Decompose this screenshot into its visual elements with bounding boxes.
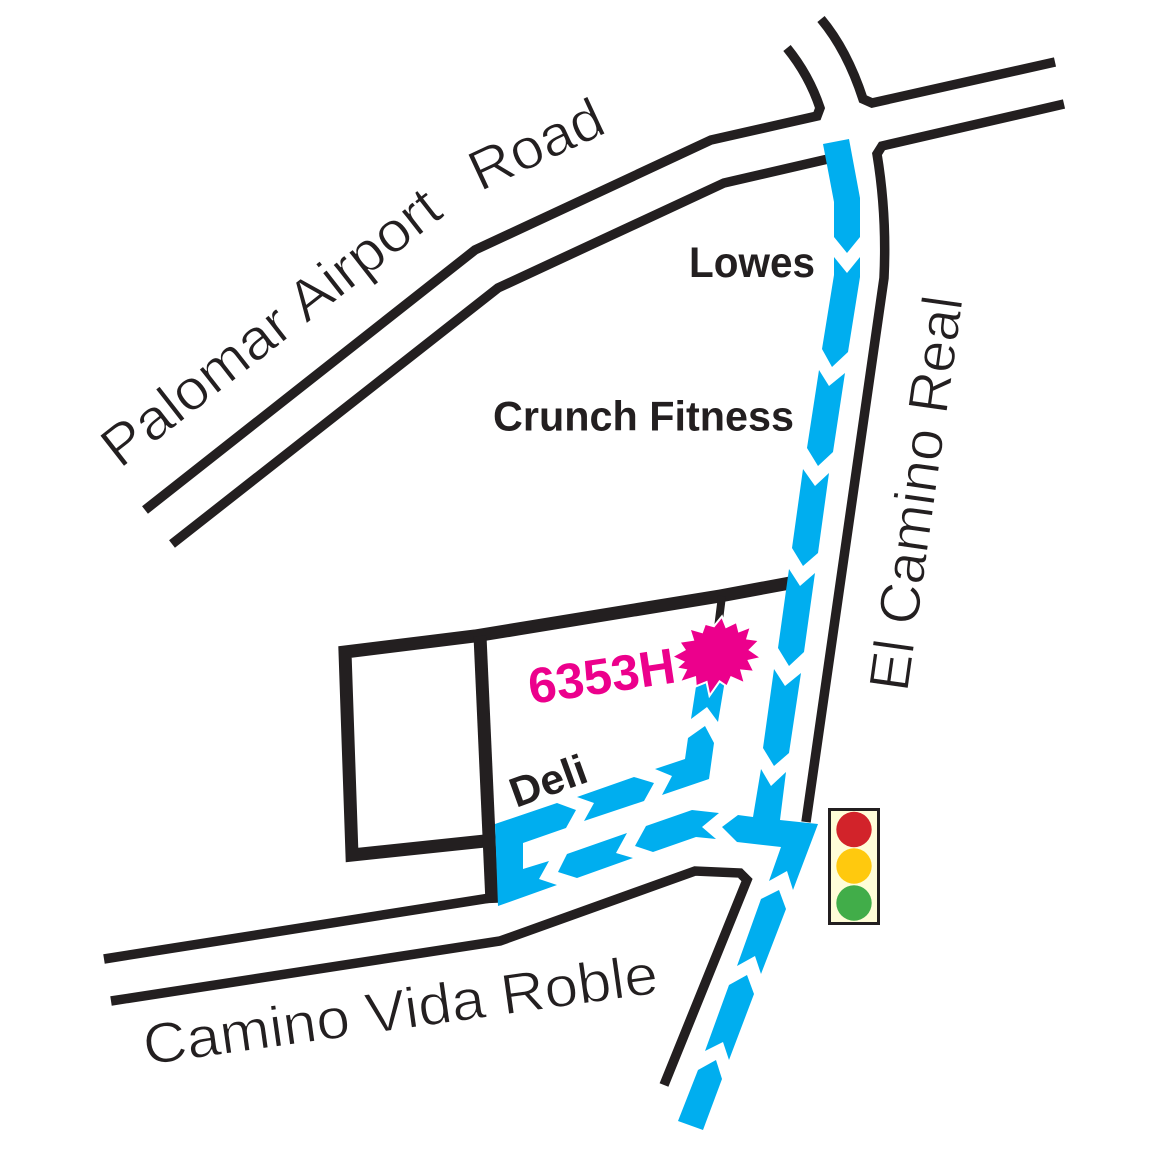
roads	[104, 19, 1064, 1085]
arrow: lower segment A	[737, 890, 786, 974]
road name: Palomar Airport: Palomar Airport	[89, 175, 454, 480]
road: Palomar Airport lower edge	[172, 159, 828, 544]
icon: traffic light	[830, 810, 878, 924]
road: Camino Vida Roble upper edge	[104, 898, 490, 959]
building: front wall	[345, 583, 790, 855]
label: Deli: Deli	[503, 745, 593, 816]
amber light	[836, 848, 872, 884]
traffic light housing	[830, 810, 878, 924]
icon: destination star	[674, 618, 759, 693]
road: Palomar Airport upper edge	[145, 48, 820, 510]
building: stub to star	[718, 596, 722, 628]
arrow: westbound E	[558, 833, 633, 878]
label: Crunch Fitness: Crunch Fitness	[493, 392, 794, 440]
arrow: westbound D	[635, 810, 719, 852]
road name: El Camino Real: El Camino Real	[857, 292, 976, 695]
green light	[836, 885, 872, 921]
road: El Camino Real east edge	[806, 104, 1064, 822]
road name: Camino Vida Roble: Camino Vida Roble	[139, 942, 662, 1078]
road: Palomar Airport east upper edge	[821, 19, 1055, 103]
arrow: segment 1	[823, 139, 860, 253]
road name: Road: Road	[458, 86, 614, 204]
building outline	[345, 583, 790, 903]
route arrows	[495, 139, 860, 1130]
arrow: final segment to star	[691, 680, 725, 722]
arrow: segment 6	[763, 669, 801, 766]
building: divider wall	[480, 636, 492, 903]
arrow: segment 5	[778, 569, 815, 666]
arrow: lower segment B	[705, 975, 754, 1060]
arrow: segment 2	[822, 257, 860, 367]
road: Camino Vida Roble lower edge	[111, 871, 747, 1085]
arrow: junction turn	[722, 769, 818, 890]
arrow: lower segment C	[678, 1060, 722, 1130]
red light	[836, 812, 872, 847]
arrow: eastbound turn H	[655, 726, 714, 795]
arrow: U-turn into lot	[495, 803, 576, 906]
arrow: segment 4	[792, 469, 829, 566]
arrow: eastbound G	[577, 777, 654, 821]
arrow: segment 3	[807, 370, 845, 466]
label: Lowes: Lowes	[689, 239, 815, 287]
label: 6353H: 6353H	[524, 638, 679, 715]
